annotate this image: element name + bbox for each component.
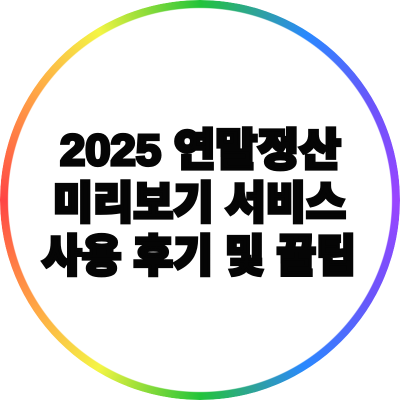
title line 3: 사용 후기 및 꿀팁	[42, 232, 356, 281]
title line 1: 2025 연말정산	[60, 126, 341, 175]
title line 2: 미리보기 서비스	[53, 179, 346, 228]
